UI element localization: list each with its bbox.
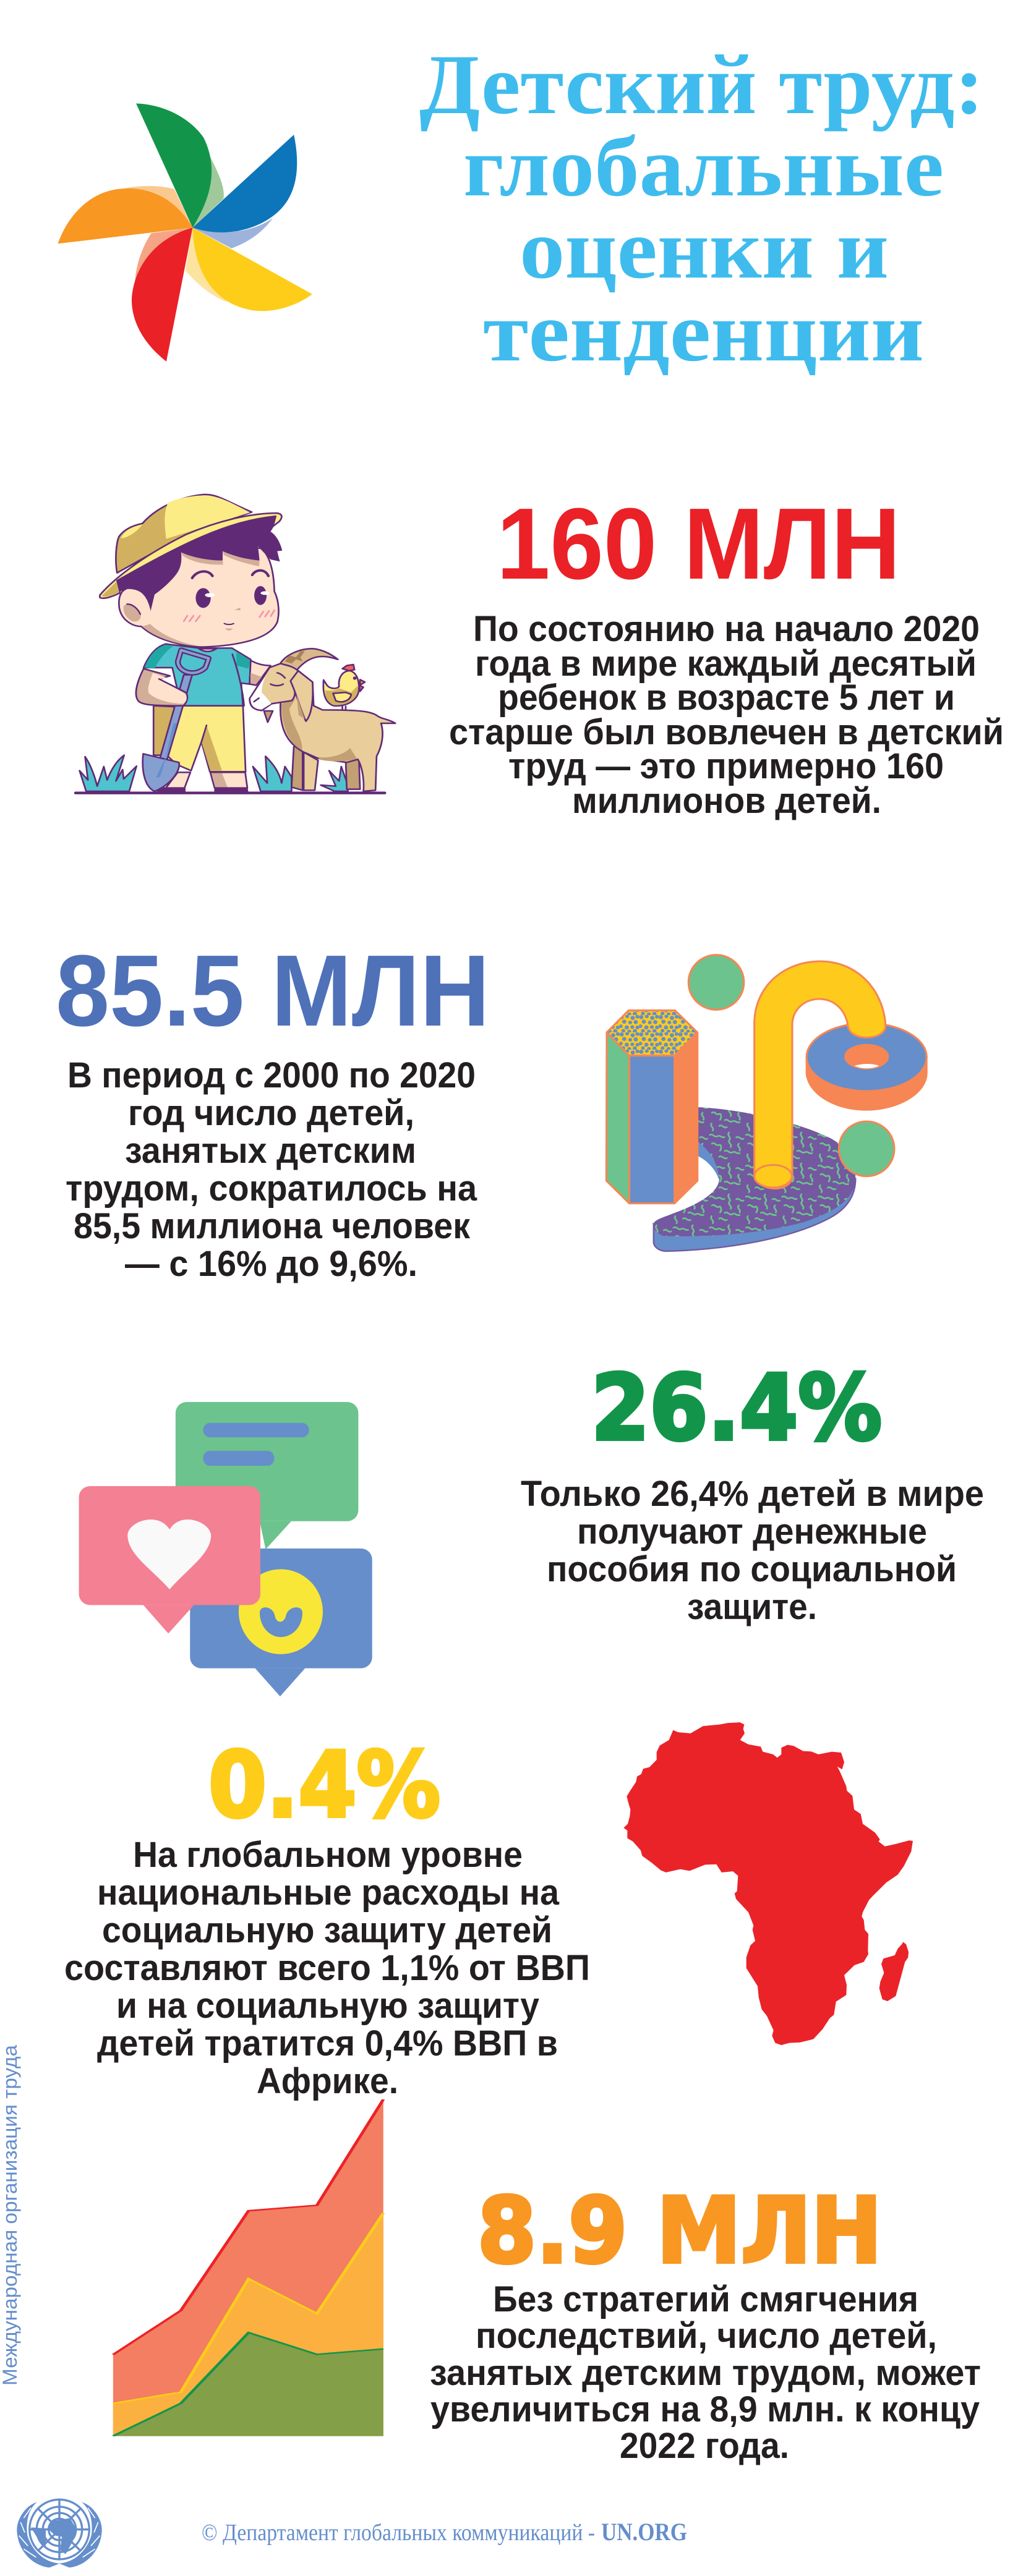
footer credit: UN.ORG (601, 2518, 687, 2546)
crescent platform (654, 1107, 855, 1251)
text block: 26.4% description: пособия по социальной (547, 1549, 957, 1589)
text block: 8.9 million description: занятых детским трудом, может (430, 2353, 981, 2393)
text block: 0.4% description: национальные расходы на (97, 1872, 560, 1913)
text block: 160 million description: труд — это примерно 160 (508, 746, 944, 786)
text block: 8.9 million description: Без стратегий смягчения (493, 2279, 918, 2319)
text block: 0.4% description: Африке. (257, 2061, 398, 2101)
legs (153, 706, 249, 793)
text block: 0.4% description: социальную защиту детей (102, 1910, 552, 1950)
brim shadow (101, 582, 119, 597)
green spheres (688, 955, 894, 1176)
goat (250, 648, 395, 791)
yellow area (113, 2213, 383, 2436)
green area (113, 2332, 383, 2436)
icon: abstract 3D shapes (606, 955, 928, 1251)
text block: 85.5 million description: 85,5 миллиона человек (74, 1206, 471, 1246)
footer credit: © Департамент глобальных коммуникаций - (202, 2520, 595, 2546)
title: тенденции (483, 284, 924, 379)
text block: 160 million description (449, 609, 1004, 821)
text block: 85.5 million description: занятых детским (125, 1131, 416, 1171)
text block: 160 million description: старше был вовлечен в детский (449, 712, 1004, 752)
title: Детский труд: (419, 37, 984, 132)
title (419, 37, 984, 379)
laurel wreaths (17, 2502, 102, 2567)
text block: 26.4% description (521, 1474, 984, 1627)
face (119, 548, 278, 647)
red area (113, 2099, 383, 2436)
text block: 160 million description: ребенок в возрасте 5 лет и (498, 678, 955, 718)
icon: pinwheel (58, 103, 312, 362)
chick (323, 665, 365, 710)
text block: 85.5 million description: В период с 2000 по 2020 (67, 1055, 476, 1095)
icon: map of Africa (623, 1722, 913, 2045)
shovel (143, 650, 208, 791)
globe rings (30, 2499, 89, 2559)
text block: 0.4% description: На глобальном уровне (133, 1835, 523, 1875)
icon: speech bubbles (79, 1402, 372, 1696)
hexagonal prism (606, 1010, 698, 1204)
text block: 0.4% description: составляют всего 1,1% от ВВП (64, 1948, 590, 1988)
text block: 85.5 million description (66, 1055, 477, 1284)
facial features (184, 571, 275, 631)
text block: 8.9 million description: увеличиться на 8,9 млн. к концу (430, 2389, 980, 2429)
text block: 8.9 million description: последствий, число детей, (476, 2316, 937, 2356)
icon: boy with goat and chick (75, 495, 395, 793)
text block: 160 million description: миллионов детей. (572, 781, 881, 821)
stat: 0.4%: 0.4% (208, 1733, 440, 1838)
shirt (143, 644, 250, 706)
text block: 0.4% description: детей тратится 0,4% ВВП в (97, 2023, 558, 2064)
area chart (113, 2099, 383, 2436)
arms (136, 660, 270, 706)
ground line (75, 789, 385, 797)
continents (31, 2518, 76, 2554)
text block: 85.5 million description: — с 16% до 9,6%. (125, 1244, 417, 1284)
pink bubble (79, 1486, 260, 1633)
title: глобальные (463, 119, 944, 214)
text block: 8.9 million description (430, 2279, 981, 2466)
ring (806, 1023, 928, 1111)
yellow tube (755, 961, 885, 1189)
grass (80, 755, 348, 791)
hat crown (116, 495, 252, 573)
stat: 26.4%: 26.4% (591, 1356, 882, 1461)
text block: 160 million description: По состоянию на начало 2020 (473, 609, 980, 649)
text block: 85.5 million description: трудом, сократилось на (66, 1168, 477, 1209)
text block: 8.9 million description: 2022 года. (620, 2426, 789, 2466)
text block: 0.4% description (64, 1835, 590, 2101)
text block: 26.4% description: защите. (687, 1587, 817, 1627)
stat: 160 млн: 160 МЛН (497, 487, 901, 600)
text block: 26.4% description: получают денежные (577, 1511, 927, 1552)
text block: 85.5 million description: год число детей, (128, 1093, 414, 1133)
green bubble (176, 1402, 358, 1549)
blue bubble (190, 1549, 372, 1696)
stat: 8.9 млн: 8.9 МЛН (477, 2179, 882, 2284)
icon: UN emblem (17, 2499, 102, 2567)
text block: 160 million description: года в мире каждый десятый (475, 644, 977, 684)
stat: 85.5 млн: 85.5 МЛН (56, 934, 490, 1047)
hair (117, 516, 282, 611)
title: оценки и (520, 202, 889, 296)
text block: 26.4% description: Только 26,4% детей в мире (521, 1474, 984, 1514)
text block: 0.4% description: и на социальную защиту (116, 1986, 539, 2026)
hat brim (100, 513, 281, 598)
